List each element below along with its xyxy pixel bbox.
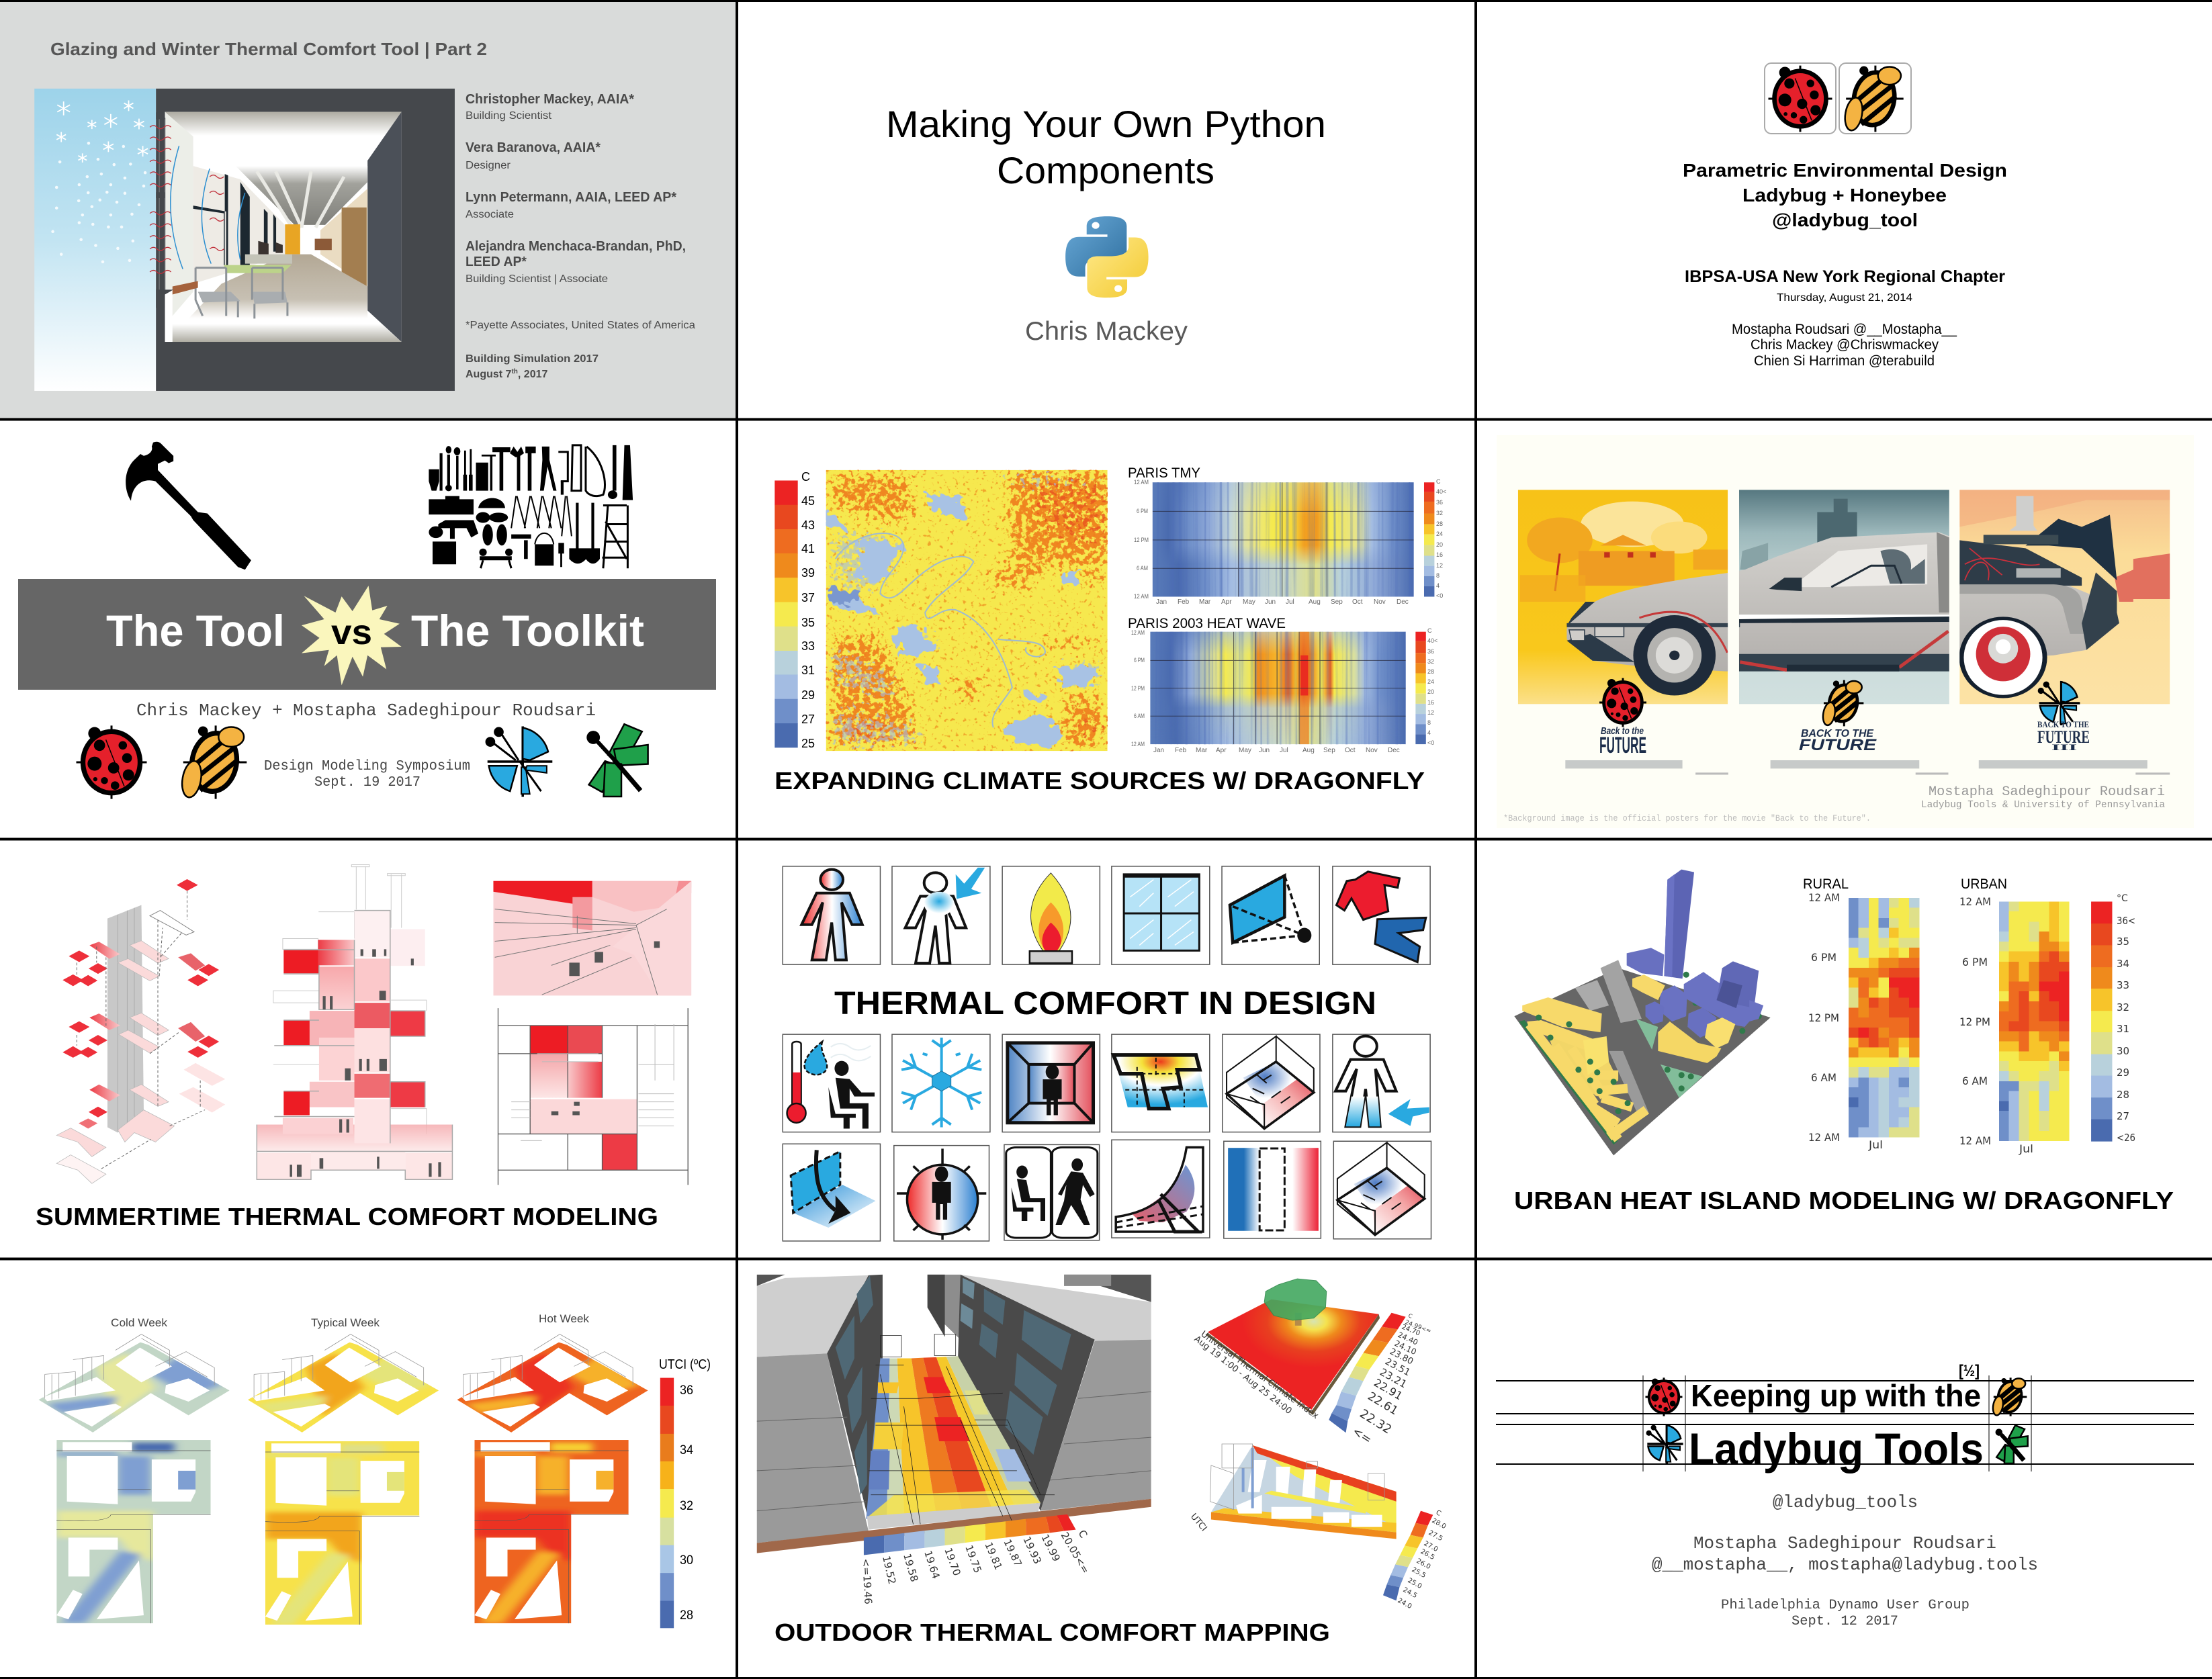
chart: Paris TMY heatmap: 12 AM — [1134, 479, 1149, 486]
chart: rural heatmap: 12 AM — [1808, 1131, 1840, 1144]
illustration: street canyon heat map — [757, 1275, 1151, 1553]
chart: Paris 2003 heat wave heatmap: Feb — [1175, 747, 1187, 754]
illustration: courtyard UTCI map: 25.0 — [1407, 1577, 1423, 1590]
UTCI legend: UTCI (ºC) — [659, 1357, 711, 1372]
temperature legend: 35 — [2117, 936, 2129, 948]
temperature legend: °C — [2117, 893, 2128, 904]
illustration: courtyard UTCI map: C — [1435, 1509, 1442, 1518]
starburst vs badge: vs — [331, 613, 372, 652]
illustration: tree shade surface: 23.21 — [1378, 1366, 1409, 1390]
chart: Paris TMY heatmap: 6 AM — [1137, 565, 1148, 572]
chart: Paris 2003 heat wave heatmap: May — [1239, 747, 1251, 754]
chart: urban heatmap: 6 AM — [1962, 1075, 1988, 1087]
panel: glazing and winter thermal comfort tool — [0, 0, 738, 420]
event and authors: Thursday, August 21, 2014 — [1777, 292, 1912, 304]
event: Design Modeling Symposium — [264, 759, 470, 774]
icon: wall temperature gradient — [1224, 1141, 1321, 1238]
temperature legend: 31 — [2117, 1023, 2129, 1035]
chart: Paris TMY heatmap: 24 — [1436, 531, 1443, 537]
presenter credit — [1921, 784, 2165, 811]
temperature legend: 25 — [801, 737, 815, 750]
icon: snowflake — [892, 1034, 990, 1132]
background image note: *Background image is the official posters for the movie "Back to the Future". — [1503, 813, 1871, 823]
diagram: exploded axonometric — [56, 879, 225, 1183]
illustration: tree shade surface: 22.32 — [1357, 1406, 1394, 1437]
panel title: EXPANDING CLIMATE SOURCES W/ DRAGONFLY — [775, 767, 1425, 795]
chart: Paris TMY heatmap: C — [1436, 478, 1441, 485]
chart: Paris TMY heatmap: 16 — [1436, 551, 1443, 558]
panel title: URBAN HEAT ISLAND MODELING W/ DRAGONFLY — [1514, 1187, 2174, 1214]
temperature legend: 34 — [2117, 958, 2129, 970]
poster 3 logo and title — [2037, 681, 2090, 752]
illustration: tree shade surface: 22.91 — [1372, 1376, 1405, 1402]
chart: urban heatmap: 12 AM — [1959, 895, 1991, 908]
event and authors: Chris Mackey @Chriswmackey — [1751, 337, 1939, 353]
temperature legend: 27 — [801, 713, 815, 726]
legend strip with rotated labels: 19.70 — [942, 1546, 963, 1578]
typical week column — [247, 1316, 440, 1625]
panel title: SUMMERTIME THERMAL COMFORT MODELING — [36, 1203, 658, 1230]
panel title: OUTDOOR THERMAL COMFORT MAPPING — [775, 1619, 1330, 1646]
temperature legend: 35 — [801, 616, 815, 629]
illustration: tree shade surface: <= — [1350, 1424, 1374, 1447]
icon: toolkit silhouettes — [429, 445, 633, 568]
chart: Paris 2003 heat wave heatmap: 32 — [1427, 658, 1434, 665]
panel: the tool vs the toolkit — [0, 421, 736, 838]
hot week column: Hot Week — [539, 1312, 590, 1325]
chart: urban heatmap: 12 PM — [1959, 1015, 1990, 1028]
icon: isometric room variant — [1333, 1141, 1431, 1239]
panel: UTCI site maps — [0, 1261, 736, 1678]
panel: summertime thermal comfort modeling — [0, 841, 736, 1258]
temperature legend: 28 — [2117, 1089, 2129, 1101]
title grid lines — [1496, 1381, 2194, 1464]
illustration: tree shade surface: Aug 19 1:00 - Aug 25 24:00 — [1192, 1334, 1294, 1416]
poster 1 logo and title — [1599, 678, 1646, 758]
authors list: th — [511, 368, 518, 375]
UTCI legend: 28 — [680, 1608, 693, 1623]
title banner: The Tool — [106, 606, 285, 655]
legend strip with rotated labels: 19.64 — [922, 1549, 942, 1580]
illustration: tree shade surface — [1192, 1279, 1432, 1447]
chart: Paris TMY heatmap: 40< — [1436, 488, 1446, 495]
icon: view factor plane — [1222, 866, 1319, 964]
icon: body temperature gradient — [783, 866, 880, 964]
UTCI legend: 34 — [680, 1443, 693, 1457]
author contact — [1652, 1534, 2038, 1575]
event — [1721, 1598, 1970, 1629]
authors list: , 2017 — [518, 369, 547, 380]
temperature legend: 27 — [2117, 1110, 2129, 1122]
presenter credit: Mostapha Sadeghipour Roudsari — [1929, 784, 2165, 800]
legend strip with rotated labels: 19.58 — [901, 1552, 920, 1583]
part marker: [½] — [1959, 1362, 1980, 1380]
chart: Paris 2003 heat wave heatmap: <0 — [1427, 739, 1434, 746]
poster 2 logo and title: BACK TO THE — [1801, 728, 1874, 739]
chart: urban heatmap: 12 AM — [1959, 1134, 1991, 1147]
chart: urban heatmap: Jul — [2019, 1142, 2033, 1155]
event and authors: IBPSA-USA New York Regional Chapter — [1685, 267, 2005, 286]
temperature legend: 39 — [801, 566, 815, 580]
presenter name: Chris Mackey — [1025, 317, 1188, 346]
chart: Paris 2003 heat wave heatmap: Aug — [1302, 747, 1315, 754]
chart: Paris TMY heatmap: 12 — [1436, 562, 1443, 569]
icon: thermometer humidity seated — [783, 1034, 880, 1132]
legend strip with rotated labels: C — [1076, 1528, 1090, 1540]
chart: Paris TMY heatmap: Jul — [1286, 598, 1294, 606]
illustration: courtyard UTCI map: 24.0 — [1397, 1597, 1413, 1610]
author contact: Mostapha Sadeghipour Roudsari — [1693, 1534, 1996, 1553]
UTCI legend: 36 — [680, 1383, 693, 1398]
poster 2 logo and title — [1799, 680, 1877, 754]
chart: urban heatmap: URBAN — [1961, 876, 2007, 892]
chart: Paris TMY heatmap: 8 — [1436, 572, 1440, 579]
legend strip with rotated labels: 19.93 — [1020, 1535, 1044, 1566]
panel: thermal comfort in design icons — [739, 841, 1475, 1258]
panel: making your own python components — [739, 0, 1475, 418]
icon: dragonfly — [1996, 1425, 2028, 1463]
title: THERMAL COMFORT IN DESIGN — [834, 986, 1376, 1022]
cold week column — [38, 1316, 231, 1623]
event and authors: Chien Si Harriman @terabuild — [1754, 353, 1935, 369]
title banner — [18, 579, 716, 690]
chart: Paris 2003 heat wave heatmap: Jul — [1280, 747, 1288, 754]
illustration: courtyard UTCI map: 25.5 — [1411, 1566, 1427, 1580]
illustration: courtyard UTCI map: 24.5 — [1402, 1586, 1418, 1600]
poster 3 logo and title: BACK TO THE — [2037, 719, 2089, 729]
chart: Paris 2003 heat wave heatmap: Apr — [1216, 747, 1227, 754]
title banner: The Toolkit — [411, 606, 644, 655]
chart: Paris 2003 heat wave heatmap: 20 — [1427, 688, 1434, 695]
chart: Paris TMY heatmap: 28 — [1436, 520, 1443, 527]
chart: Paris 2003 heat wave heatmap: Dec — [1388, 747, 1400, 754]
chart: Paris TMY heatmap: Dec — [1397, 598, 1409, 606]
chart: Paris TMY heatmap: Oct — [1352, 598, 1363, 606]
chart: Paris TMY heatmap: <0 — [1436, 592, 1443, 599]
event: Philadelphia Dynamo User Group — [1721, 1598, 1970, 1613]
illustration: window section with interior photo — [34, 89, 455, 391]
illustration: tree shade surface: 23.51 — [1383, 1356, 1412, 1378]
authors list: Building Simulation 2017 — [466, 353, 599, 365]
chart: rural heatmap — [1803, 876, 1919, 1151]
icon: honeybee — [179, 725, 247, 799]
icon: python logo — [1065, 216, 1149, 298]
icon: room mean radiant temperature — [1002, 1034, 1100, 1132]
temperature legend: 29 — [2117, 1067, 2129, 1079]
chart: Paris 2003 heat wave heatmap: 4 — [1427, 729, 1431, 736]
temperature legend: 45 — [801, 494, 815, 508]
chart: Paris 2003 heat wave heatmap: 16 — [1427, 699, 1434, 706]
chart: Paris TMY heatmap: Nov — [1374, 598, 1386, 606]
chart: Paris TMY heatmap: 20 — [1436, 541, 1443, 548]
title: Keeping up with the — [1691, 1378, 1981, 1413]
UTCI legend: 32 — [680, 1499, 693, 1513]
icon: floor temperature map — [1112, 1034, 1210, 1132]
chart: Paris 2003 heat wave heatmap: 28 — [1427, 668, 1434, 675]
authors list: Associate — [466, 209, 514, 220]
chart: Paris 2003 heat wave heatmap: 6 AM — [1134, 713, 1145, 719]
authors list: Lynn Petermann, AAIA, LEED AP* — [466, 190, 676, 205]
legend strip with rotated labels: 19.75 — [963, 1543, 984, 1575]
temperature legend: 30 — [2117, 1045, 2129, 1057]
chart: Paris TMY heatmap — [1128, 465, 1446, 606]
illustration: courtyard UTCI map: UTCI — [1188, 1512, 1208, 1533]
event and authors: Mostapha Roudsari @__Mostapha__ — [1732, 322, 1957, 337]
title: Making Your Own Python — [886, 103, 1326, 145]
temperature legend: 33 — [801, 639, 815, 653]
icon: window — [1112, 866, 1210, 964]
chart: Paris 2003 heat wave heatmap: 8 — [1427, 719, 1431, 726]
authors list: August 7 — [466, 369, 511, 380]
authors: Chris Mackey + Mostapha Sadeghipour Roudsari — [136, 700, 596, 721]
chart: Paris TMY heatmap: May — [1243, 598, 1255, 606]
icon: ladybug tile — [1765, 63, 1836, 134]
illustration: tree shade surface: 22.61 — [1365, 1390, 1400, 1418]
handle: @ladybug_tools — [1773, 1493, 1918, 1512]
chart: Paris 2003 heat wave heatmap: 12 — [1427, 709, 1434, 716]
temperature legend: 32 — [2117, 1001, 2129, 1013]
icon: flame — [1002, 866, 1100, 964]
illustration: courtyard UTCI map: 27.0 — [1423, 1540, 1439, 1553]
legend strip with rotated labels: 19.52 — [880, 1555, 898, 1586]
icon: honeybee tile — [1839, 63, 1911, 134]
title — [886, 103, 1326, 191]
event — [264, 759, 470, 790]
temperature legend: 41 — [801, 542, 815, 555]
poster 2 logo and title: FUTURE — [1799, 736, 1877, 754]
temperature legend — [775, 470, 815, 750]
chart: Paris TMY heatmap: Apr — [1221, 598, 1232, 606]
illustration: courtyard UTCI map: 28.0 — [1431, 1517, 1447, 1531]
title: Parametric Environmental Design — [1683, 160, 2007, 181]
illustration: tree shade surface: 24.70 — [1401, 1324, 1421, 1338]
chart: Paris TMY heatmap: 12 PM — [1134, 537, 1149, 543]
panel: outdoor thermal comfort mapping — [756, 1275, 1446, 1641]
chart: Paris 2003 heat wave heatmap: 12 PM — [1131, 685, 1145, 692]
authors list: Christopher Mackey, AAIA* — [466, 92, 634, 107]
illustration: 3D urban model — [1514, 870, 1771, 1155]
chart: Paris TMY heatmap: 6 PM — [1137, 508, 1148, 514]
authors list: Alejandra Menchaca-Brandan, PhD, — [466, 239, 686, 254]
poster 1 logo and title: Back to the — [1601, 725, 1644, 737]
authors list: Vera Baranova, AAIA* — [466, 140, 601, 155]
authors list: Building Scientist | Associate — [466, 273, 608, 285]
temperature legend — [2091, 893, 2135, 1144]
chart: Paris 2003 heat wave heatmap: Nov — [1366, 747, 1378, 754]
chart: Paris 2003 heat wave heatmap: 24 — [1427, 678, 1434, 685]
illustration: courtyard UTCI map — [1188, 1444, 1447, 1610]
chart: Paris 2003 heat wave heatmap: Jan — [1153, 747, 1164, 754]
chart: rural heatmap: Jul — [1868, 1138, 1883, 1151]
chart: Paris 2003 heat wave heatmap — [1128, 616, 1437, 754]
title — [1683, 160, 2007, 230]
temperature legend: 37 — [801, 591, 815, 604]
icon: honeybee — [1992, 1377, 2027, 1416]
authors list: *Payette Associates, United States of America — [466, 320, 695, 331]
temperature legend: <26 — [2117, 1132, 2135, 1144]
illustration: tree shade surface: C — [1407, 1312, 1413, 1320]
chart: Paris 2003 heat wave heatmap: 12 AM — [1131, 629, 1145, 636]
chart: urban heatmap: 6 PM — [1962, 956, 1988, 968]
event: Sept. 19 2017 — [314, 775, 421, 790]
chart: Paris 2003 heat wave heatmap: C — [1427, 627, 1432, 634]
chart: Paris 2003 heat wave heatmap: Mar — [1196, 747, 1208, 754]
icon: body with floor cold draft — [1333, 1034, 1430, 1132]
authors list: Designer — [466, 160, 511, 171]
chart: rural heatmap: 6 PM — [1811, 951, 1837, 964]
chart: Paris 2003 heat wave heatmap: 12 AM — [1131, 741, 1145, 747]
icon: radiant compass person — [894, 1146, 989, 1241]
authors list — [466, 92, 695, 380]
chart: Paris TMY heatmap: Mar — [1199, 598, 1211, 606]
icon: downdraft from window — [783, 1144, 880, 1241]
icon: sitting and walking — [1004, 1144, 1100, 1240]
cold week column: Cold Week — [111, 1316, 167, 1329]
temperature legend: 29 — [801, 688, 815, 702]
chart: Paris TMY heatmap: Jun — [1265, 598, 1276, 606]
chart: Paris 2003 heat wave heatmap: Sep — [1323, 747, 1335, 754]
legend strip with rotated labels: <=19.46 — [860, 1558, 875, 1604]
temperature legend: 31 — [801, 664, 815, 677]
icon: dragonfly — [586, 724, 648, 797]
icon: clothing — [1333, 866, 1430, 964]
title: Glazing and Winter Thermal Comfort Tool | Part 2 — [50, 39, 487, 59]
icon: butterfly — [1646, 1424, 1683, 1463]
title: Ladybug + Honeybee — [1742, 185, 1947, 206]
title: Components — [997, 149, 1214, 191]
illustration: courtyard UTCI map: 26.0 — [1415, 1557, 1431, 1571]
title: Ladybug Tools — [1689, 1424, 1984, 1473]
chart: rural heatmap: 12 PM — [1808, 1011, 1839, 1024]
poster 1 logo and title: FUTURE — [1599, 733, 1646, 758]
chart: Paris TMY heatmap: Jan — [1156, 598, 1167, 606]
icon: ladybug — [1646, 1377, 1682, 1416]
illustration: tree shade surface: 23.80 — [1388, 1347, 1415, 1367]
chart: Paris TMY heatmap: 36 — [1436, 499, 1443, 506]
UTCI legend: 30 — [680, 1553, 693, 1568]
land surface temperature map — [826, 465, 1116, 751]
chart: Paris TMY heatmap: Feb — [1178, 598, 1190, 606]
illustration: courtyard UTCI map: 26.5 — [1419, 1548, 1435, 1561]
chart: Paris 2003 heat wave heatmap: 36 — [1427, 648, 1434, 655]
legend strip with rotated labels — [860, 1514, 1092, 1604]
temperature legend: C — [801, 470, 810, 484]
chart: Paris 2003 heat wave heatmap: 6 PM — [1134, 657, 1145, 664]
legend strip with rotated labels: 20.05<= — [1059, 1530, 1092, 1576]
chart: rural heatmap: 12 AM — [1808, 891, 1840, 904]
chart: Paris TMY heatmap: 12 AM — [1134, 593, 1149, 600]
chart: Paris TMY heatmap: 32 — [1436, 510, 1443, 516]
icon: hammer — [126, 442, 251, 570]
icon: isometric room — [1223, 1034, 1320, 1132]
icon: psychrometric chart — [1112, 1140, 1210, 1238]
illustration: three posters with DeLorean — [1518, 490, 2170, 775]
temperature legend: 43 — [801, 518, 815, 532]
UTCI legend — [659, 1357, 711, 1628]
event: Sept. 12 2017 — [1791, 1614, 1898, 1629]
chart: Paris TMY heatmap: 4 — [1436, 582, 1440, 589]
legend strip with rotated labels: 19.87 — [1001, 1537, 1024, 1569]
chart: Paris TMY heatmap: Sep — [1331, 598, 1343, 606]
authors list: LEED AP* — [466, 255, 527, 269]
panel: keeping up with the ladybug tools — [1478, 1261, 2212, 1678]
presenter credit: Ladybug Tools & University of Pennsylvania — [1921, 800, 2165, 811]
chart: Paris 2003 heat wave heatmap: 40< — [1427, 637, 1437, 644]
event and authors — [1685, 267, 2005, 369]
illustration: interior perspective — [493, 881, 691, 995]
icon: ladybug — [77, 725, 146, 799]
illustration: tree shade surface: 24.10 — [1393, 1338, 1418, 1357]
authors list: Building Scientist — [466, 110, 552, 122]
panel: expanding climate sources — [775, 467, 1446, 790]
poster 3 logo and title: FUTURE — [2037, 727, 2090, 747]
temperature legend: 36< — [2117, 915, 2135, 927]
panel: parametric environmental design — [1478, 0, 2212, 418]
icon: butterfly — [486, 727, 552, 797]
chart: rural heatmap: RURAL — [1803, 876, 1849, 892]
panel: back to the future posters — [1478, 421, 2212, 838]
icon: shortwave solar on body — [892, 866, 990, 964]
diagram: building section — [257, 864, 452, 1179]
hot week column — [456, 1312, 650, 1623]
chart: Paris 2003 heat wave heatmap: PARIS 2003 HEAT WAVE — [1128, 616, 1286, 631]
temperature legend: 33 — [2117, 979, 2129, 991]
title: @ladybug_tool — [1772, 210, 1918, 230]
title — [1689, 1378, 1984, 1473]
legend strip with rotated labels: 19.99 — [1038, 1533, 1063, 1563]
diagram: floor plan — [498, 1008, 688, 1185]
legend strip with rotated labels: 19.81 — [982, 1541, 1005, 1572]
chart: Paris TMY heatmap: Aug — [1309, 598, 1321, 606]
author contact: @__mostapha__, mostapha@ladybug.tools — [1652, 1555, 2038, 1575]
illustration: courtyard UTCI map: 27.5 — [1427, 1529, 1444, 1543]
chart: rural heatmap: 6 AM — [1811, 1071, 1837, 1084]
chart: Paris TMY heatmap: PARIS TMY — [1128, 465, 1200, 481]
illustration: tree shade surface: 24.40 — [1397, 1330, 1419, 1347]
illustration: tree shade surface: Universal Thermal Climate Index — [1199, 1329, 1321, 1421]
poster 3 logo and title: III — [2051, 742, 2077, 752]
chart: urban heatmap — [1959, 876, 2069, 1155]
chart: Paris 2003 heat wave heatmap: Jun — [1259, 747, 1270, 754]
panel: urban heat island modeling — [1478, 841, 2212, 1258]
starburst vs badge — [302, 586, 402, 685]
illustration: tree shade surface: 24.99<= — [1404, 1319, 1432, 1335]
chart: Paris 2003 heat wave heatmap: Oct — [1345, 747, 1356, 754]
typical week column: Typical Week — [311, 1316, 380, 1329]
